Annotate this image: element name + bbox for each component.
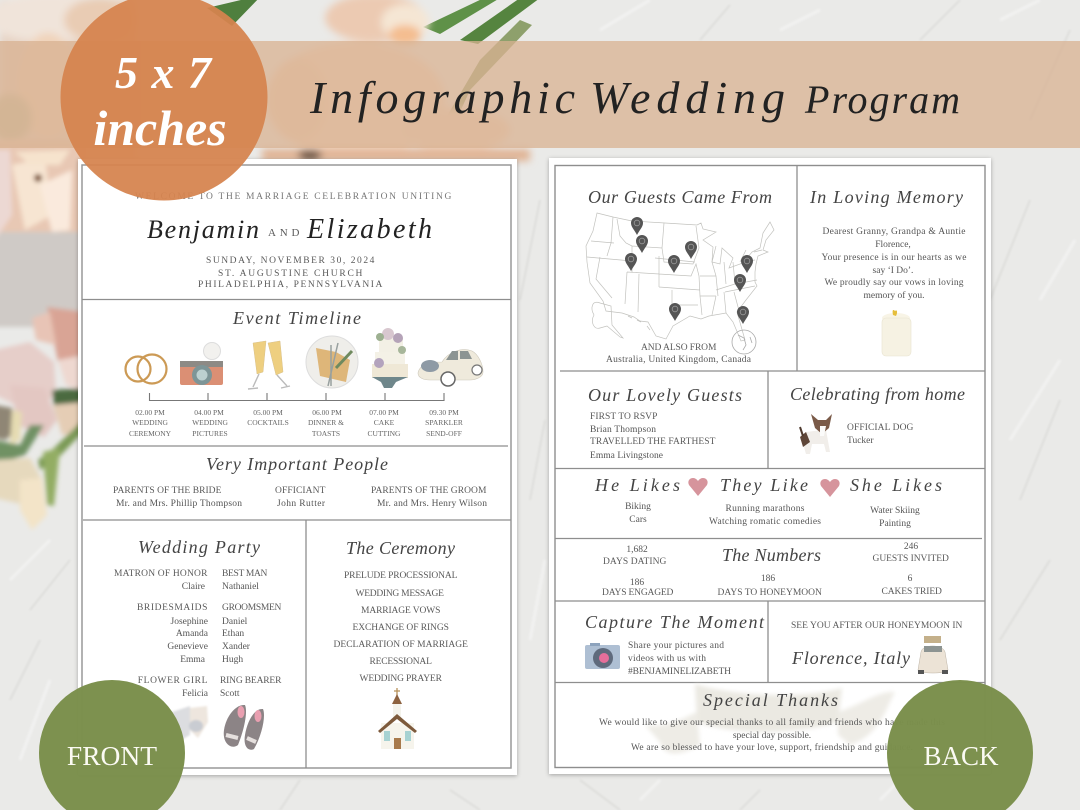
section: very important people: PARENTS OF THE GROOM	[371, 486, 487, 496]
section: likes: He Likes	[594, 475, 680, 495]
left strip flowers	[0, 140, 85, 530]
section: wedding party: Felicia	[182, 689, 209, 699]
section: our lovely guests	[588, 385, 742, 461]
timeline labels: CEREMONY	[129, 429, 172, 438]
icon: plate setting	[306, 336, 358, 388]
section: wedding party	[114, 537, 282, 699]
timeline labels: 05.00 PM	[253, 408, 283, 417]
badge: front	[39, 680, 185, 810]
section: wedding party: Daniel	[222, 617, 248, 627]
map pins	[625, 217, 753, 324]
section: in loving memory: Your presence is in our hearts as we	[822, 253, 966, 263]
section: our lovely guests: TRAVELLED THE FARTHEST	[590, 437, 716, 447]
section: wedding party: Genevieve	[167, 642, 208, 652]
badge: back	[887, 680, 1033, 810]
section: wedding party: Wedding Party	[138, 537, 260, 557]
section: the numbers: 6	[908, 574, 913, 584]
section: the numbers	[602, 542, 950, 598]
timeline labels: WEDDING	[192, 418, 228, 427]
icon: church	[378, 688, 417, 749]
section: special thanks: special day possible.	[733, 731, 811, 741]
welcome header: AND	[268, 227, 300, 239]
section: special thanks	[599, 690, 945, 753]
icon: wedding cake	[372, 328, 408, 388]
section: in loving memory: Dearest Granny, Grandpa & Auntie	[822, 227, 966, 237]
timeline labels: COCKTAILS	[247, 418, 289, 427]
section: the ceremony: WEDDING MESSAGE	[356, 589, 444, 599]
section: the ceremony: PRELUDE PROCESSIONAL	[344, 571, 458, 581]
also from text: Australia, United Kingdom, Canada	[606, 355, 752, 365]
section: wedding party: Nathaniel	[222, 582, 259, 592]
section: in loving memory: In Loving Memory	[809, 187, 963, 207]
section: the numbers: 186	[630, 578, 644, 588]
section: wedding party: MATRON OF HONOR	[114, 569, 208, 579]
title: Infographic Wedding Program: Wedding	[590, 72, 785, 123]
section: in loving memory	[809, 187, 966, 301]
timeline labels: 07.00 PM	[369, 408, 399, 417]
section: likes: Painting	[879, 519, 911, 529]
badge: 5 x 7 inches	[60, 0, 268, 200]
section: very important people: Very Important People	[206, 454, 388, 474]
section: the numbers: CAKES TRIED	[882, 587, 942, 597]
heading: Our Guests Came From: Our Guests Came From	[588, 187, 772, 207]
section: the ceremony	[334, 538, 468, 684]
section: capture the moment	[585, 612, 765, 677]
section: celebrating from home: OFFICIAL DOG	[847, 423, 914, 433]
section: ribbon art	[645, 684, 895, 754]
badge: 5 x 7 inches: 5 x 7	[115, 47, 213, 98]
timeline labels: 02.00 PM	[135, 408, 165, 417]
section: special thanks: We are so blessed to have your love, support, friendship and guidance.	[631, 742, 913, 753]
section: likes: Cars	[629, 515, 647, 525]
section: likes: Water Skiing	[870, 506, 920, 516]
icon: dog	[800, 414, 832, 454]
section: wedding party: BRIDESMAIDS	[137, 603, 208, 613]
heading: Event Timeline: Event Timeline	[232, 308, 361, 328]
timeline labels: CUTTING	[368, 429, 401, 438]
section: wedding party: Ethan	[222, 629, 244, 639]
section: capture the moment: Share your pictures and	[628, 641, 724, 651]
icon: champagne glasses	[248, 341, 290, 389]
section: honeymoon destination: Florence, Italy	[791, 648, 910, 668]
section: very important people: John Rutter	[277, 499, 326, 509]
section: the numbers: The Numbers	[722, 545, 821, 565]
timeline labels: DINNER &	[308, 418, 344, 427]
section: likes	[594, 475, 942, 529]
timeline labels	[129, 408, 463, 438]
section: wedding party: Claire	[182, 582, 205, 592]
icon: globe	[732, 330, 756, 354]
section: in loving memory: say ‘I Do’.	[873, 266, 913, 276]
section: the ceremony: RECESSIONAL	[370, 657, 432, 667]
section: in loving memory: Florence,	[875, 240, 911, 250]
icon: heart	[688, 478, 708, 496]
timeline labels: 04.00 PM	[194, 408, 224, 417]
icon: heart	[820, 479, 840, 497]
section: likes: Running marathons	[726, 504, 805, 514]
section: wedding party: Emma	[180, 655, 206, 665]
section: wedding party: Josephine	[171, 617, 208, 627]
section: wedding party: Amanda	[176, 629, 209, 639]
badge: front: FRONT	[67, 740, 157, 771]
section: the numbers: DAYS TO HONEYMOON	[718, 588, 822, 598]
section: likes: They Like	[720, 475, 808, 495]
timeline labels: CAKE	[374, 418, 395, 427]
welcome header: PHILADELPHIA, PENNSYLVANIA	[198, 280, 383, 290]
timeline labels: WEDDING	[132, 418, 168, 427]
section: the ceremony: EXCHANGE OF RINGS	[352, 623, 450, 633]
section: likes: Watching romatic comedies	[709, 517, 821, 527]
icon: camera	[180, 342, 223, 385]
section: wedding party: FLOWER GIRL	[138, 676, 208, 686]
section: honeymoon destination: SEE YOU AFTER OUR HONEYMOON IN	[791, 621, 963, 631]
badge: 5 x 7 inches: inches	[93, 100, 227, 156]
timeline icons	[126, 328, 483, 389]
section: celebrating from home: Celebrating from home	[790, 384, 965, 404]
also from text	[606, 343, 752, 365]
section: wedding party: Hugh	[222, 655, 243, 665]
section: celebrating from home	[790, 384, 965, 454]
section: in loving memory: We proudly say our vows in loving	[824, 278, 964, 288]
section: very important people: Mr. and Mrs. Henry Wilson	[377, 499, 487, 509]
section: celebrating from home: Tucker	[847, 436, 874, 446]
section: our lovely guests: Our Lovely Guests	[588, 385, 742, 405]
background: flowers and stems	[0, 0, 540, 530]
section: the ceremony: The Ceremony	[346, 538, 455, 558]
icon: candle	[882, 310, 911, 356]
section: the numbers: GUESTS INVITED	[872, 554, 950, 564]
section: honeymoon destination	[791, 621, 963, 674]
icon: bridal shoes	[172, 706, 208, 743]
section: very important people: Mr. and Mrs. Phillip Thompson	[116, 499, 242, 509]
section: the numbers: 1,682	[626, 545, 648, 555]
section: wedding party: BEST MAN	[222, 569, 268, 579]
section: capture the moment: Capture The Moment	[585, 612, 765, 632]
section: special thanks: We would like to give our special thanks to all family and friends who have made this	[599, 717, 945, 728]
section: the numbers: DAYS DATING	[603, 557, 667, 567]
map: USA	[586, 213, 774, 341]
title banner	[0, 41, 1080, 148]
also from text: AND ALSO FROM	[641, 343, 717, 353]
icon: groom shoes	[224, 705, 264, 750]
welcome header: Benjamin	[147, 215, 259, 244]
panel: front card	[78, 159, 517, 775]
section: in loving memory: memory of you.	[864, 290, 924, 301]
title: Infographic Wedding Program: Infographic	[309, 72, 575, 123]
section: the ceremony: MARRIAGE VOWS	[361, 606, 441, 616]
section: wedding party: RING BEARER	[220, 676, 282, 686]
section: wedding party: Scott	[220, 689, 240, 699]
section: likes: Biking	[625, 502, 651, 512]
section: likes: She Likes	[850, 475, 942, 495]
section: our lovely guests: Brian Thompson	[590, 425, 656, 435]
title: Infographic Wedding Program: Program	[804, 77, 960, 122]
timeline labels: 09.30 PM	[429, 408, 459, 417]
section: capture the moment: #BENJAMINELIZABETH	[628, 667, 731, 677]
section: very important people: PARENTS OF THE BRIDE	[113, 486, 222, 496]
section: special thanks: Special Thanks	[703, 690, 838, 710]
panel: back card	[549, 158, 991, 774]
section: the ceremony: WEDDING PRAYER	[360, 674, 443, 684]
section: the ceremony: DECLARATION OF MARRIAGE	[334, 640, 468, 650]
section: the numbers: 246	[904, 542, 918, 552]
timeline axis	[150, 393, 444, 400]
timeline labels: 06.00 PM	[312, 408, 342, 417]
welcome header: WELCOME TO THE MARRIAGE CELEBRATION UNITING	[135, 192, 452, 202]
section: our lovely guests: FIRST TO RSVP	[590, 412, 658, 422]
welcome header	[135, 192, 452, 290]
timeline labels: PICTURES	[192, 429, 228, 438]
title: Infographic Wedding Program	[309, 72, 960, 123]
timeline labels: SPARKLER	[425, 418, 463, 427]
section: the numbers: 186	[761, 574, 775, 584]
badge: back: BACK	[923, 741, 999, 771]
section: capture the moment: videos with us with	[628, 654, 706, 664]
section: very important people: OFFICIANT	[275, 486, 326, 496]
timeline labels: SEND-OFF	[426, 429, 462, 438]
icon: beetle car	[918, 636, 948, 674]
welcome header: ST. AUGUSTINE CHURCH	[218, 269, 363, 279]
timeline labels: TOASTS	[312, 429, 340, 438]
icon: rings	[126, 354, 166, 384]
icon: blue camera	[585, 643, 620, 669]
welcome header: SUNDAY, NOVEMBER 30, 2024	[206, 256, 375, 266]
section: wedding party: GROOMSMEN	[222, 603, 282, 613]
section: very important people	[113, 454, 487, 509]
section: wedding party: Xander	[222, 642, 251, 652]
welcome header: Elizabeth	[306, 214, 432, 245]
section: the numbers: DAYS ENGAGED	[602, 588, 674, 598]
icon: vintage car	[418, 350, 483, 386]
section: our lovely guests: Emma Livingstone	[590, 451, 663, 461]
